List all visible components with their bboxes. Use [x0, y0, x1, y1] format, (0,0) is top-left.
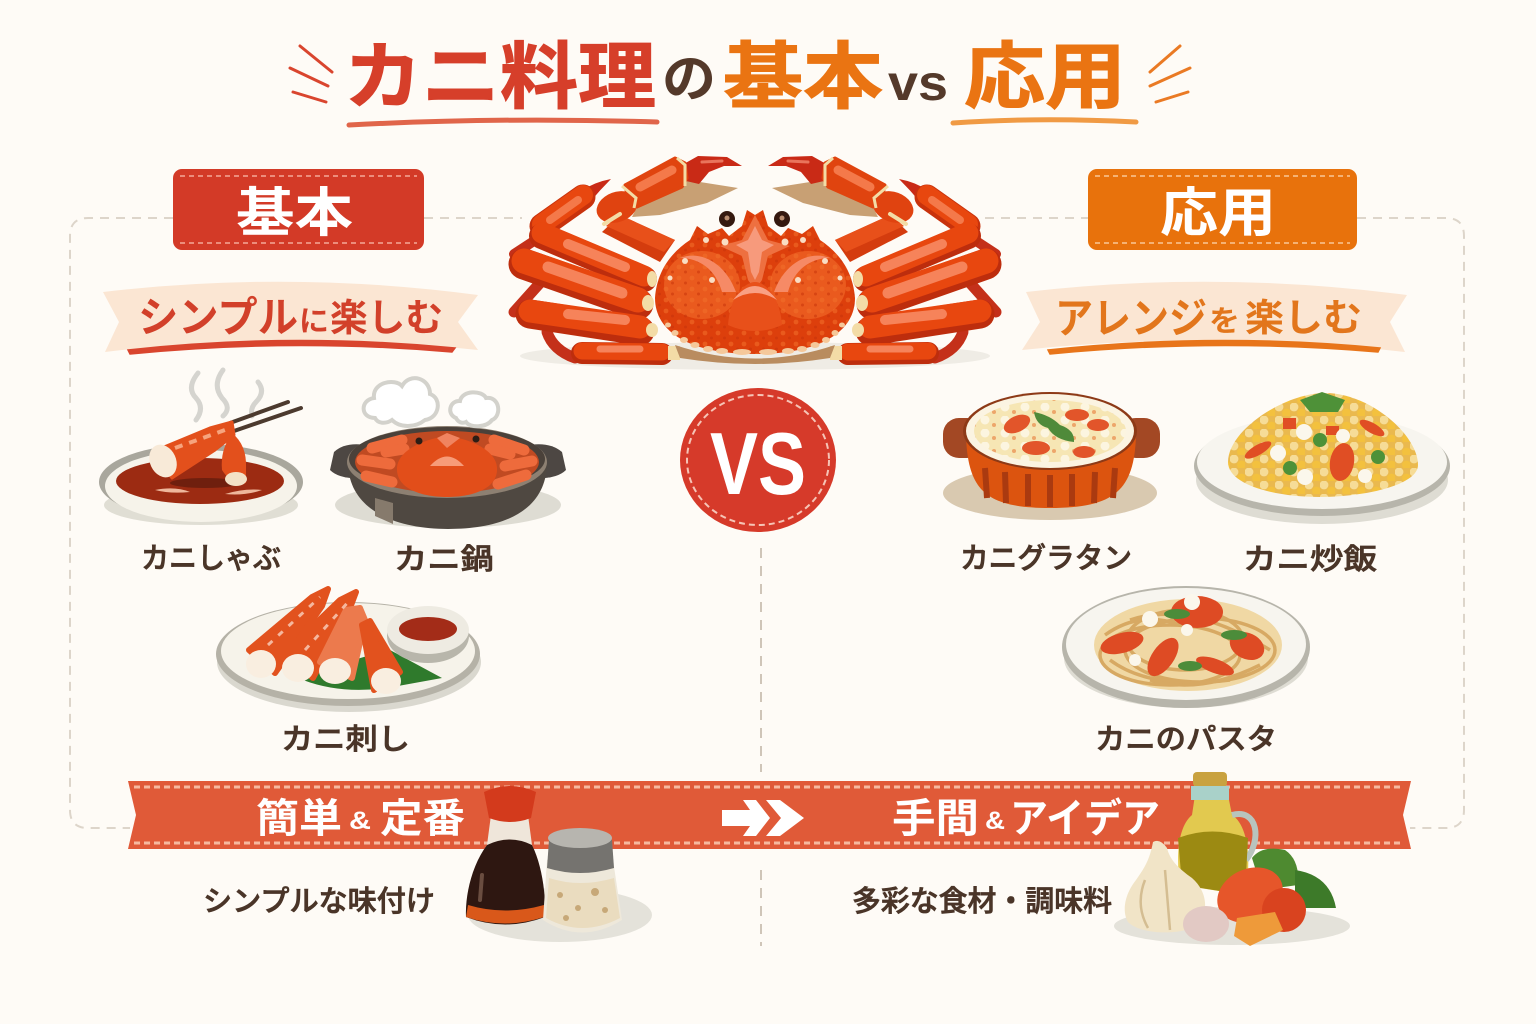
title underline red [349, 120, 657, 125]
chopsticks [230, 402, 301, 431]
icon: oil, garlic and vegetables [1114, 772, 1350, 946]
ribbon: enjoy simply: に [299, 306, 329, 338]
text: simple seasoning: シンプルな味付け [203, 885, 435, 918]
ribbon: enjoy simply [103, 282, 478, 354]
VS badge: VS [710, 414, 806, 513]
centre dashed divider [760, 548, 762, 946]
icon: soy sauce and salt [466, 786, 652, 942]
crab leg [152, 422, 234, 478]
dashed outline frame [70, 218, 1464, 828]
ribbon: enjoy arrangements: 楽しむ [1245, 298, 1362, 340]
title text: no: の [662, 51, 716, 109]
dish: crab gratin [943, 392, 1160, 520]
ribbon text: ideas: アイデア [1010, 796, 1160, 841]
central snow crab illustration [514, 156, 996, 370]
ribbon ampersand left: & [349, 807, 371, 835]
ribbon text: classic: 定番 [380, 797, 465, 841]
title text: basic: 基本 [723, 37, 883, 118]
label: crab gratin: カニグラタン [960, 542, 1132, 575]
ribbon ampersand right: & [985, 807, 1005, 835]
label: crab sashimi: カニ刺し [281, 724, 410, 756]
badge: applied: 応用 [1160, 184, 1276, 243]
label: crab hot pot: カニ鍋 [394, 543, 494, 576]
badge: basic [173, 169, 424, 250]
dish: crab sashimi [216, 589, 481, 712]
ribbon text: effort: 手間 [892, 797, 979, 841]
ribbon: enjoy arrangements [1022, 282, 1407, 354]
dish: crab fried rice [1194, 392, 1450, 524]
dish: crab shabu [99, 370, 303, 525]
ribbon: enjoy simply: 楽しむ [330, 298, 443, 340]
label: crab fried rice: カニ炒飯 [1243, 543, 1377, 576]
badge: applied [1088, 169, 1357, 250]
ribbon text: easy and standard: 簡単 [256, 797, 342, 841]
text: varied ingredients and seasonings: 多彩な食材・調味料 [852, 885, 1112, 918]
label: crab shabu: カニしゃぶ [141, 543, 281, 575]
title [290, 37, 1190, 125]
title accent lines left [290, 46, 332, 102]
title underline orange [953, 120, 1136, 123]
dish: crab hot pot [330, 378, 566, 529]
steam clouds [364, 378, 438, 426]
title text: applied: 応用 [964, 37, 1126, 118]
steam [191, 370, 262, 420]
dish: crab pasta [1062, 586, 1310, 708]
title text: vs: vs [888, 55, 948, 111]
label: crab pasta: カニのパスタ [1095, 724, 1277, 756]
title accent lines right [1150, 46, 1190, 102]
ribbon: enjoy arrangements: を [1209, 306, 1240, 338]
title text: crab cuisine: カニ料理 [344, 37, 656, 118]
ribbon: enjoy simply: シンプル [138, 294, 298, 341]
badge: basic: 基本 [236, 184, 353, 243]
VS badge [680, 388, 836, 532]
ribbon: enjoy arrangements: アレンジ [1055, 295, 1207, 342]
bottom ribbon [128, 781, 1411, 849]
ribbon arrow [722, 800, 804, 836]
